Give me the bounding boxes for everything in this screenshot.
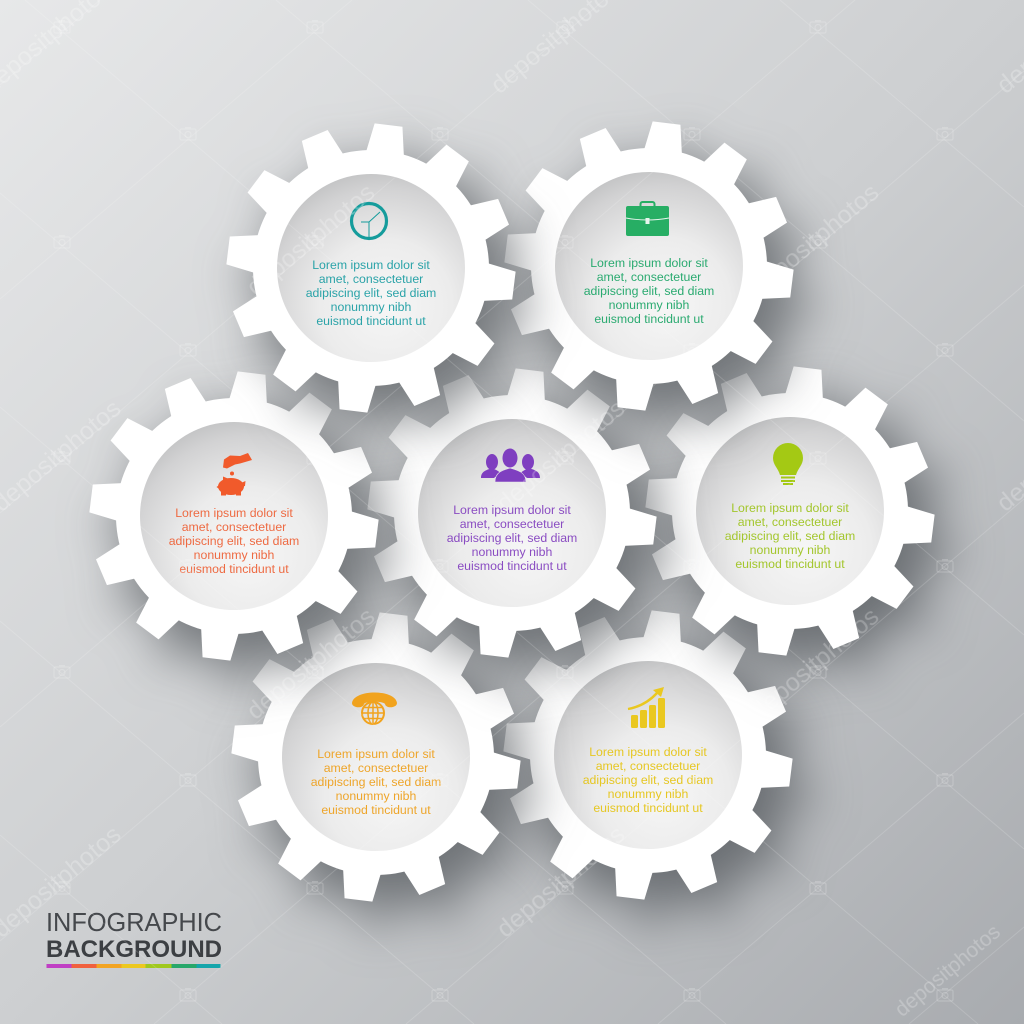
gear: top left, teal (211, 108, 531, 428)
watermark overlay: depositphotos (241, 602, 380, 725)
icon: group of people (481, 448, 540, 482)
gear body (488, 595, 808, 915)
text block: amet, consectetuer (319, 272, 423, 286)
text block: Lorem ipsum dolor sit (453, 503, 571, 517)
text block: nonummy nibh (331, 300, 411, 314)
gear body (216, 597, 536, 917)
text block: adipiscing elit, sed diam (311, 775, 441, 789)
inner disc (418, 419, 606, 607)
gear: bottom left, orange (216, 597, 536, 917)
text block: euismod tincidunt ut (321, 803, 431, 817)
text block: adipiscing elit, sed diam (583, 773, 713, 787)
text block: Lorem ipsum dolor sit (589, 745, 707, 759)
text block (306, 258, 436, 328)
text block: euismod tincidunt ut (179, 562, 289, 576)
rainbow bar (46, 964, 220, 968)
text block: amet, consectetuer (324, 761, 428, 775)
text block: Lorem ipsum dolor sit (312, 258, 430, 272)
text block: adipiscing elit, sed diam (725, 529, 855, 543)
text block: adipiscing elit, sed diam (584, 284, 714, 298)
inner disc (554, 661, 742, 849)
text block: euismod tincidunt ut (593, 801, 703, 815)
text block: amet, consectetuer (738, 515, 842, 529)
gear: right, lime (630, 351, 950, 671)
text block (447, 503, 577, 573)
watermark overlay: depositphotos (745, 602, 884, 725)
inner disc (277, 174, 465, 362)
title: BACKGROUND (46, 936, 222, 963)
text block: adipiscing elit, sed diam (169, 534, 299, 548)
inner disc (696, 417, 884, 605)
watermark overlay: depositphotos (491, 394, 630, 517)
gear: top right, green (489, 106, 809, 426)
text block: Lorem ipsum dolor sit (175, 506, 293, 520)
icon: light bulb (773, 443, 803, 485)
gear body (74, 356, 394, 676)
text block (169, 506, 299, 576)
inner disc (555, 172, 743, 360)
watermark overlay: depositphotos (241, 178, 380, 301)
gear: centre, purple (352, 353, 672, 673)
text block: nonummy nibh (608, 787, 688, 801)
watermark overlay: depositphotos (891, 920, 1005, 1022)
icon: hand and piggy bank (216, 453, 252, 496)
text block: nonummy nibh (750, 543, 830, 557)
icon: rising bar chart (628, 687, 665, 728)
text block: euismod tincidunt ut (457, 559, 567, 573)
text block: euismod tincidunt ut (316, 314, 426, 328)
watermark overlay: depositphotos (491, 820, 630, 943)
watermark overlay: depositphotos (745, 178, 884, 301)
text block: amet, consectetuer (596, 759, 700, 773)
icon: telephone with globe (352, 692, 397, 724)
text block: euismod tincidunt ut (594, 312, 704, 326)
text block: amet, consectetuer (597, 270, 701, 284)
gear body (630, 351, 950, 671)
text block (584, 256, 714, 326)
title (46, 907, 222, 963)
gear: left, red-orange (74, 356, 394, 676)
text block: euismod tincidunt ut (735, 557, 845, 571)
gear body (489, 106, 809, 426)
icon: briefcase (626, 202, 669, 236)
text block: nonummy nibh (472, 545, 552, 559)
gear body (352, 353, 672, 673)
text block: Lorem ipsum dolor sit (590, 256, 708, 270)
text block: nonummy nibh (194, 548, 274, 562)
inner disc (140, 422, 328, 610)
gear: bottom right, yellow (488, 595, 808, 915)
text block: adipiscing elit, sed diam (306, 286, 436, 300)
gear body (211, 108, 531, 428)
text block (725, 501, 855, 571)
text block: nonummy nibh (609, 298, 689, 312)
text block: nonummy nibh (336, 789, 416, 803)
text block: adipiscing elit, sed diam (447, 531, 577, 545)
text block: Lorem ipsum dolor sit (731, 501, 849, 515)
text block: Lorem ipsum dolor sit (317, 747, 435, 761)
inner disc (282, 663, 470, 851)
text block: amet, consectetuer (182, 520, 286, 534)
text block (311, 747, 441, 817)
text block: amet, consectetuer (460, 517, 564, 531)
text block (583, 745, 713, 815)
title: INFOGRAPHIC (46, 907, 222, 937)
icon: clock (352, 204, 386, 238)
